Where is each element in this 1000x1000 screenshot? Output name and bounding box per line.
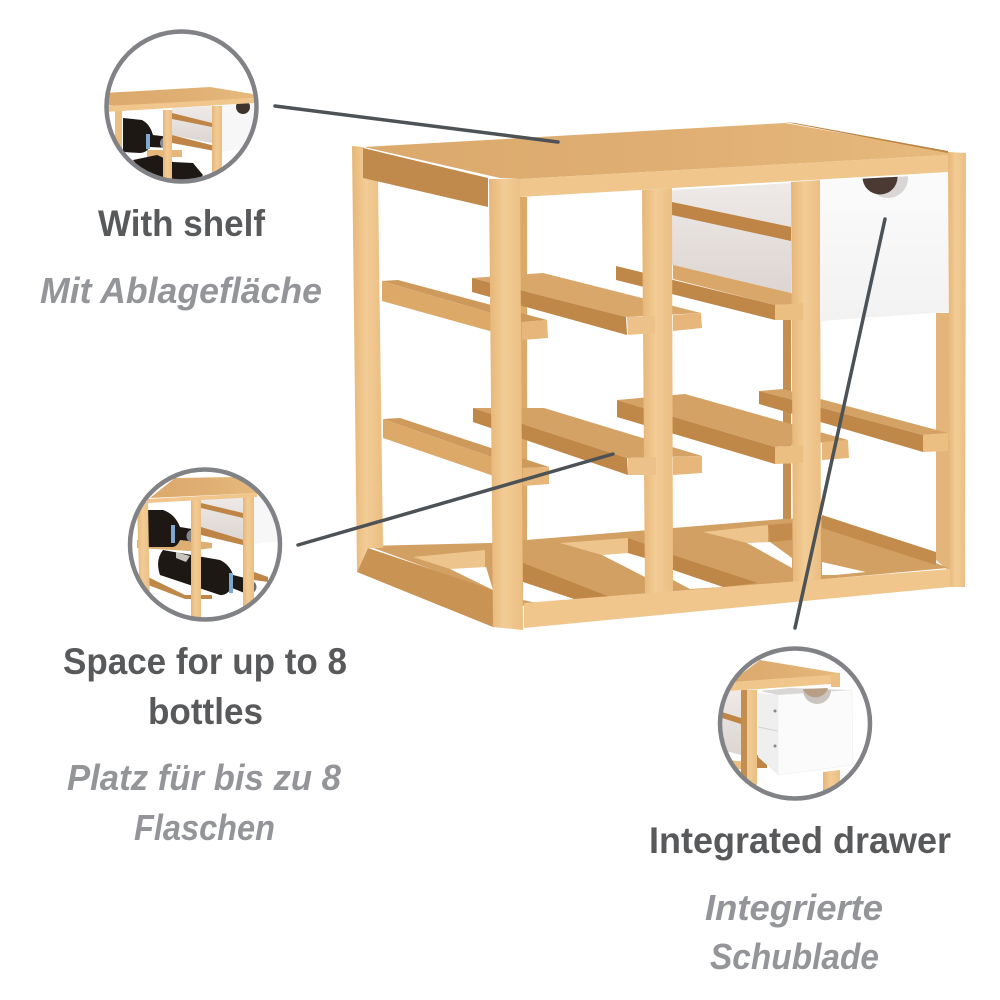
heading: space for bottles <box>63 641 347 732</box>
subheading: Platz für bis zu 8 Flaschen: Flaschen <box>134 807 275 848</box>
detail circle: bottles <box>125 465 285 625</box>
heading: with shelf: With shelf <box>98 203 266 244</box>
table top <box>363 122 948 207</box>
subheading: Integrierte Schublade: Integrierte <box>705 887 883 928</box>
product: bamboo wine rack <box>352 122 966 630</box>
posts <box>352 146 966 630</box>
heading: space for bottles: bottles <box>148 691 263 732</box>
base floor with slats <box>368 517 948 606</box>
heading: space for bottles: Space for up to 8 <box>63 641 347 682</box>
subheading: Mit Ablagefläche: Mit Ablagefläche <box>40 270 322 311</box>
drawer front <box>820 176 948 321</box>
detail circle: shelf <box>104 29 259 184</box>
slat end faces in front of posts <box>627 303 803 475</box>
lower row wine slats <box>383 389 948 486</box>
heading: integrated drawer: Integrated drawer <box>649 820 951 861</box>
detail circle: drawer <box>715 645 875 805</box>
subheading: Platz für bis zu 8 Flaschen <box>67 757 341 848</box>
upper row wine slats <box>382 265 803 340</box>
side rails of base <box>357 515 936 627</box>
circle ring <box>130 470 280 620</box>
circle ring <box>106 32 256 182</box>
subheading: Integrierte Schublade <box>705 887 883 977</box>
subheading: Integrierte Schublade: Schublade <box>710 936 879 977</box>
leader line: bottles <box>298 454 613 545</box>
subheading: Platz für bis zu 8 Flaschen: Platz für bis zu 8 <box>67 757 341 798</box>
leader line: drawer <box>795 219 885 628</box>
rear posts and drawer housing <box>520 183 950 572</box>
circle ring <box>720 648 870 798</box>
leader line: shelf <box>275 106 558 142</box>
front base rail <box>524 569 950 628</box>
